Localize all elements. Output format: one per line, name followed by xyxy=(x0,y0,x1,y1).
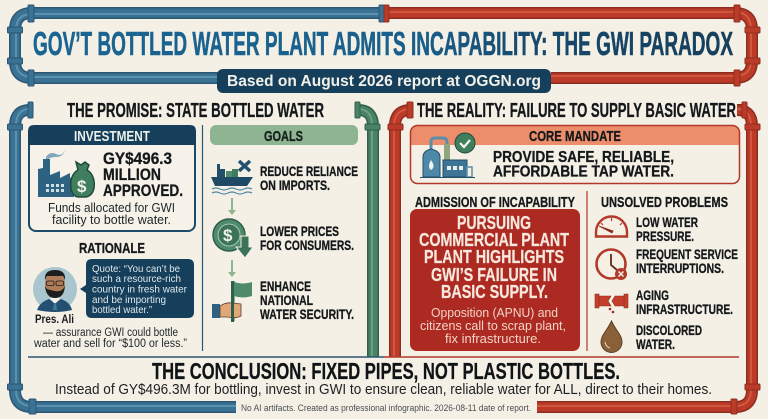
pipe frame: title, blue xyxy=(8,5,384,86)
panel: the reality xyxy=(410,100,740,353)
icon: treatment plant with check xyxy=(420,133,475,178)
icon: cargo ship crossed xyxy=(211,161,253,194)
investment card xyxy=(28,125,196,231)
speech bubble quote xyxy=(80,259,194,318)
admission card: fix infrastructure. xyxy=(445,332,541,346)
arrow down xyxy=(228,260,236,277)
problem: service interruptions: INTERRUPTIONS. xyxy=(636,261,724,276)
core mandate statement: PROVIDE SAFE, RELIABLE, xyxy=(493,149,674,166)
goals header: GOALS xyxy=(264,128,303,145)
assurance note: — assurance GWI could bottle xyxy=(43,327,178,339)
problem: aging infrastructure: AGING xyxy=(636,288,669,303)
pipe: promise panel right, green xyxy=(355,102,380,357)
problem: aging infrastructure xyxy=(636,288,733,317)
icon: clock with x xyxy=(596,250,627,280)
admission card: GWI’S FAILURE IN xyxy=(431,265,557,285)
admission card: PLANT HIGHLIGHTS xyxy=(424,247,564,267)
goal: lower prices: LOWER PRICES xyxy=(260,224,339,239)
pipe: reality panel right and bottom, red xyxy=(537,102,760,414)
icon: pressure gauge xyxy=(596,216,627,236)
arrow down xyxy=(228,198,236,215)
icon: coin with down arrow xyxy=(213,219,253,258)
core mandate card xyxy=(410,126,740,184)
icon: factory and money bag: $ xyxy=(77,177,87,196)
problem: low water pressure xyxy=(636,215,698,244)
admission card: citizens call to scrap plant, xyxy=(420,319,566,333)
icon: broken pipe xyxy=(595,294,628,313)
goal: water security: ENHANCE xyxy=(260,279,311,294)
subtitle badge: Based on August 2026 report at OGGN.org xyxy=(227,73,541,90)
rationale heading: RATIONALE xyxy=(79,241,145,257)
speech bubble quote: Quote: “You can’t be xyxy=(92,263,180,275)
avatar: Pres. Ali xyxy=(33,267,77,312)
goal: water security: NATIONAL xyxy=(260,293,313,308)
core mandate statement: AFFORDABLE TAP WATER. xyxy=(493,164,674,180)
goal: water security xyxy=(260,279,354,322)
goal: reduce reliance: REDUCE RELIANCE xyxy=(260,164,358,179)
problem: discolored water: DISCOLORED xyxy=(636,323,702,338)
investment note: Funds allocated for GWI xyxy=(48,201,175,215)
speaker name: Pres. Ali xyxy=(35,314,74,326)
core mandate statement xyxy=(493,149,674,180)
goal: lower prices xyxy=(260,224,354,253)
speech bubble quote: and be importing xyxy=(92,294,166,306)
problem: low water pressure: PRESSURE. xyxy=(636,229,694,244)
icon: discolored drop xyxy=(601,321,622,353)
investment card: INVESTMENT xyxy=(74,128,150,145)
admission card: COMMERCIAL PLANT xyxy=(419,230,569,250)
problem: aging infrastructure: INFRASTRUCTURE. xyxy=(636,302,733,317)
investment amount: MILLION xyxy=(103,165,161,184)
investment amount: APPROVED. xyxy=(103,181,183,200)
investment note: facility to bottle water. xyxy=(52,213,171,227)
icon: hand holding flag xyxy=(212,281,252,322)
admission card xyxy=(410,209,580,351)
icon: factory and money bag xyxy=(38,150,94,197)
unsolved problems heading: UNSOLVED PROBLEMS xyxy=(601,195,728,211)
panel: the promise xyxy=(28,100,358,351)
core mandate card: CORE MANDATE xyxy=(529,129,621,145)
icon: coin with down arrow: $ xyxy=(223,226,233,245)
investment note xyxy=(48,201,175,227)
admission heading: ADMISSION OF INCAPABILITY xyxy=(415,195,575,211)
problem: discolored water xyxy=(636,323,702,352)
goals header xyxy=(210,125,358,145)
investment amount xyxy=(103,149,183,200)
goal: lower prices: FOR CONSUMERS. xyxy=(260,238,354,253)
pipe: promise panel left and bottom, blue xyxy=(8,102,236,414)
goal: reduce reliance: ON IMPORTS. xyxy=(260,178,330,193)
problem: discolored water: WATER. xyxy=(636,337,675,352)
subtitle badge xyxy=(217,69,551,93)
assurance note: water and sell for “$100 or less.” xyxy=(33,338,187,350)
investment amount: GY$496.3 xyxy=(103,149,172,168)
problem: low water pressure: LOW WATER xyxy=(636,215,698,230)
assurance note xyxy=(33,327,187,350)
pipe: reality panel left, red xyxy=(388,102,413,357)
admission card: BASIC SUPPLY. xyxy=(441,282,548,302)
speech bubble quote: country in fresh water xyxy=(92,284,187,296)
speech bubble quote: such a resource-rich xyxy=(92,273,181,285)
problem: service interruptions xyxy=(636,247,738,276)
pipe frame: title, red xyxy=(384,5,760,86)
goal: water security: WATER SECURITY. xyxy=(260,307,354,322)
goal: reduce reliance xyxy=(260,164,358,193)
conclusion text: Instead of GY$496.3M for bottling, invest in GWI to ensure clean, reliable water for ALL, direct to their homes. xyxy=(55,382,712,398)
speech bubble quote: bottled water.” xyxy=(92,304,152,316)
admission card: PURSUING xyxy=(457,213,531,233)
footer note: No AI artifacts. Created as professional infographic. 2026-08-11 date of report. xyxy=(241,403,531,413)
heading: the promise: THE PROMISE: STATE BOTTLED WATER xyxy=(67,100,324,122)
admission card: Opposition (APNU) and xyxy=(431,306,558,320)
